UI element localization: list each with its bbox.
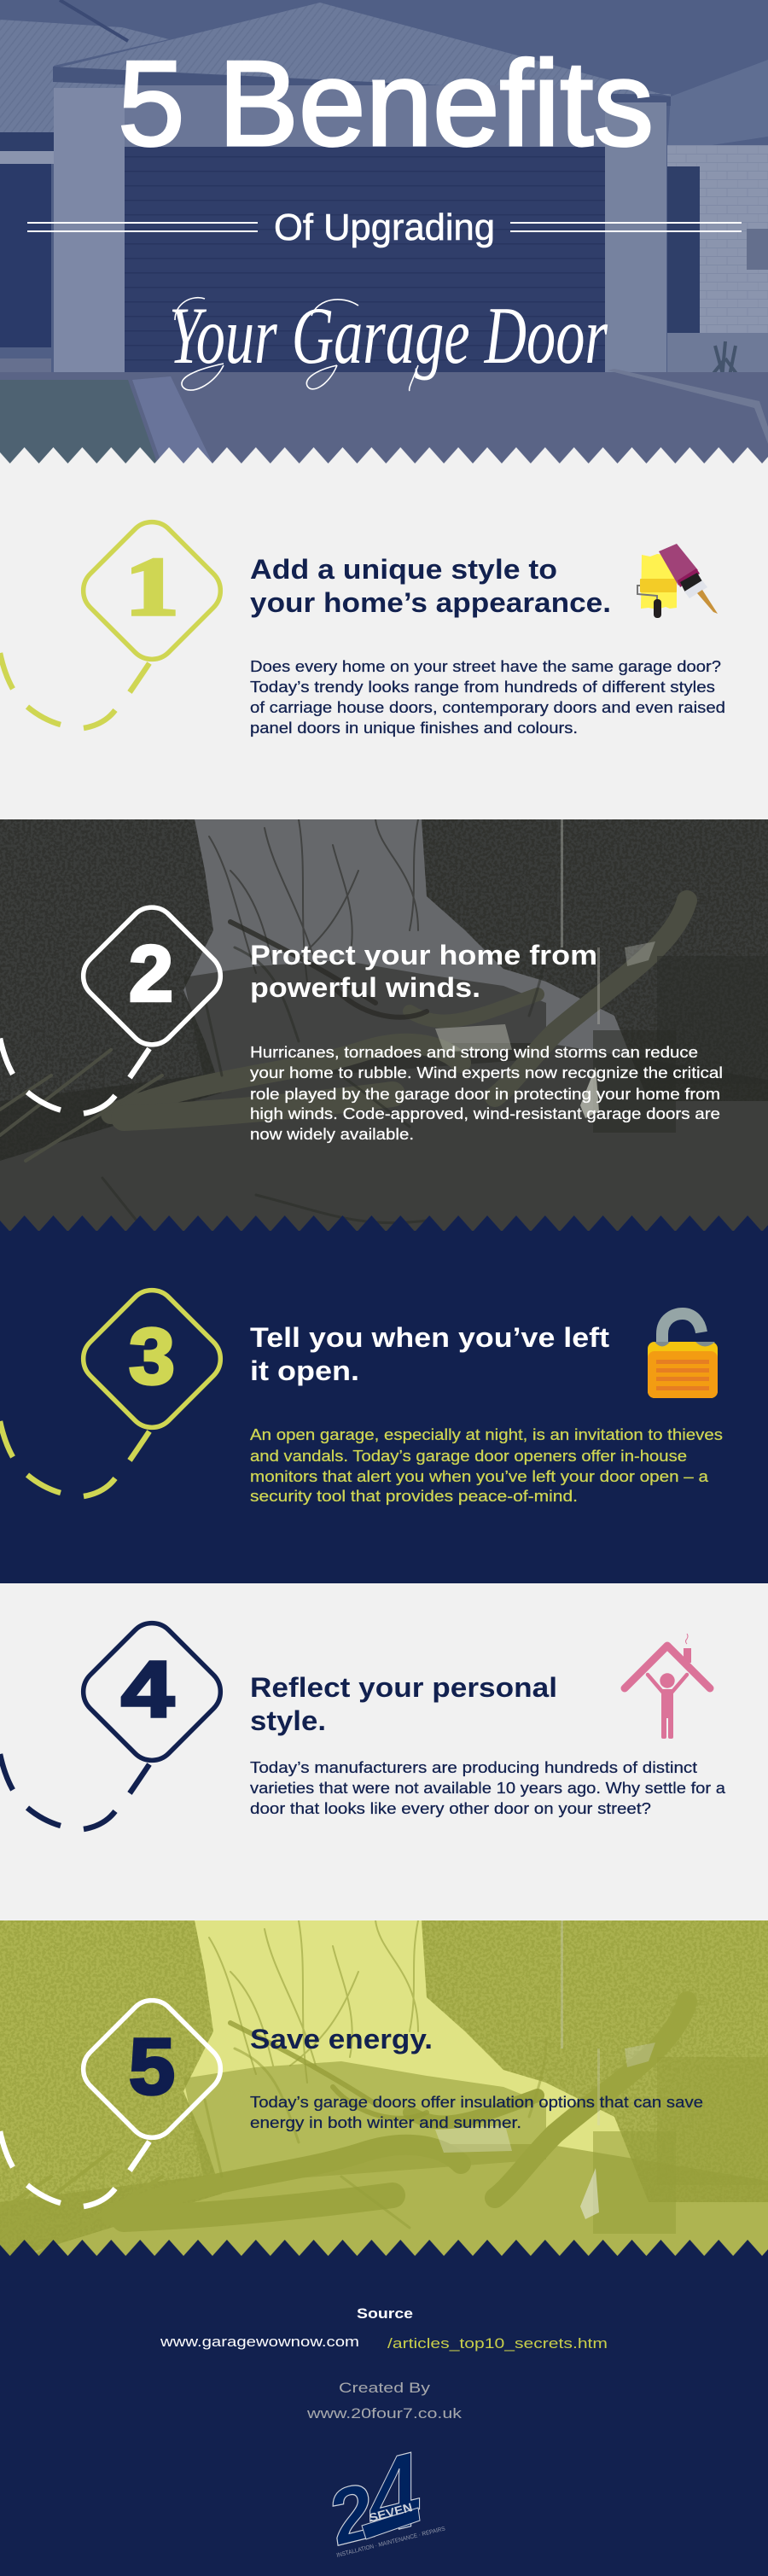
badge: number 5: 5 (129, 2022, 175, 2111)
heading: benefit 5: Save energy. (250, 2024, 433, 2054)
driveway and grass (0, 372, 768, 465)
logo: 24 seven: INSTALLATION · MAINTENANCE · REPAIRS (336, 2526, 446, 2559)
icon: open padlock (648, 1314, 718, 1398)
body text: An open garage, especially at night, is an invitation to thieves (250, 1426, 723, 1443)
garage header and door (125, 85, 605, 149)
panel: footer (0, 2256, 768, 2576)
badge: number 1: 1 (125, 541, 179, 633)
body text: benefit 5: energy in both winter and summer. (250, 2114, 521, 2131)
subtitle: Of Upgrading with double rules: Of Upgrading (274, 207, 495, 248)
badge: number 4: 4 (121, 1645, 174, 1734)
body text: Today’s manufacturers are producing hundreds of distinct (250, 1759, 697, 1776)
body text: benefit 2: role played by the garage door in protecting your home from (250, 1086, 720, 1103)
hero zigzag edge (0, 447, 768, 463)
badge: number 1 (0, 512, 230, 728)
heading (250, 1322, 609, 1386)
heading: Tell you when you’ve left (250, 1322, 609, 1353)
subtitle: Of Upgrading with double rules (27, 207, 742, 248)
creator url: www.20four7.co.uk (306, 2405, 463, 2422)
script title: Your Garage Door: Your Garage Door (169, 290, 608, 381)
panel: hero garage photo (0, 0, 768, 465)
body text: of carriage house doors, contemporary doors and even raised (250, 699, 725, 716)
created by: Created By (339, 2380, 431, 2396)
heading (250, 1672, 557, 1736)
body text (250, 1426, 723, 1505)
logo: 24 seven: SEVEN (368, 2500, 414, 2525)
panel: benefit 1 (0, 463, 768, 819)
panel: benefit 4 (0, 1583, 768, 1920)
body text: panel doors in unique finishes and colours. (250, 720, 578, 737)
body text: benefit 2: Hurricanes, tornadoes and strong wind storms can reduce (250, 1044, 698, 1061)
badge: number 2: 2 (129, 929, 173, 1017)
badge: number 5 (0, 1990, 230, 2206)
body text: and vandals. Today’s garage door openers offer in-house (250, 1448, 687, 1465)
badge: number 3 (0, 1280, 230, 1496)
heading: it open. (250, 1355, 359, 1386)
source url: www.garagewownow.com (160, 2334, 359, 2350)
body text: monitors that alert you when you’ve left your door open – a (250, 1468, 709, 1485)
body text: door that looks like every other door on your street? (250, 1800, 651, 1817)
panel: benefit 3 (0, 1231, 768, 1583)
heading: benefit 2: Protect your home from (250, 940, 597, 970)
body text: benefit 5 (250, 2094, 703, 2131)
source path: /articles_top10_secrets.htm (387, 2335, 608, 2352)
body text: Today’s trendy looks range from hundreds of different styles (250, 679, 715, 696)
heading: benefit 2 (250, 940, 597, 1003)
panel: benefit 2 storm photo (0, 819, 768, 1231)
heading: benefit 2: powerful winds. (250, 972, 480, 1003)
left house and wall (0, 132, 55, 151)
heading: your home’s appearance. (250, 587, 611, 618)
body text: varieties that were not available 10 years ago. Why settle for a (250, 1780, 726, 1797)
body text (250, 658, 725, 737)
badge: number 2 (0, 898, 230, 1113)
heading (250, 554, 611, 618)
logo: 24 seven: 2 (325, 2464, 380, 2563)
house roofs (0, 20, 169, 132)
section 5 zigzag edge (0, 2240, 768, 2256)
body text (250, 1759, 726, 1817)
right house (667, 145, 768, 337)
icon: person holding house roof (625, 1634, 710, 1739)
heading: Reflect your personal (250, 1672, 557, 1703)
body text: benefit 2: now widely available. (250, 1126, 414, 1143)
section 2 zigzag edge (0, 1215, 768, 1232)
title: 5 Benefits: 5 Benefits (118, 36, 654, 172)
body text: benefit 5: Today’s garage doors offer insulation options that can save (250, 2094, 703, 2111)
badge: number 4 (0, 1613, 230, 1829)
heading: Add a unique style to (250, 554, 557, 585)
logo: 24 seven: 4 (369, 2427, 420, 2560)
panel: benefit 5 tinted storm photo (0, 1920, 768, 2256)
heading: style. (250, 1705, 326, 1736)
logo: 24 seven (325, 2427, 446, 2563)
body text: benefit 2 (250, 1044, 723, 1143)
badge: number 3: 3 (129, 1312, 175, 1401)
body text: benefit 2: high winds. Code-approved, wind-resistant garage doors are (250, 1105, 720, 1122)
icon: paint roller and brush (637, 544, 718, 618)
body text: Does every home on your street have the same garage door? (250, 658, 721, 675)
source label: Source (357, 2305, 413, 2322)
body text: security tool that provides peace-of-mind. (250, 1488, 578, 1505)
body text: benefit 2: your home to rubble. Wind experts now recognize the critical (250, 1064, 723, 1081)
